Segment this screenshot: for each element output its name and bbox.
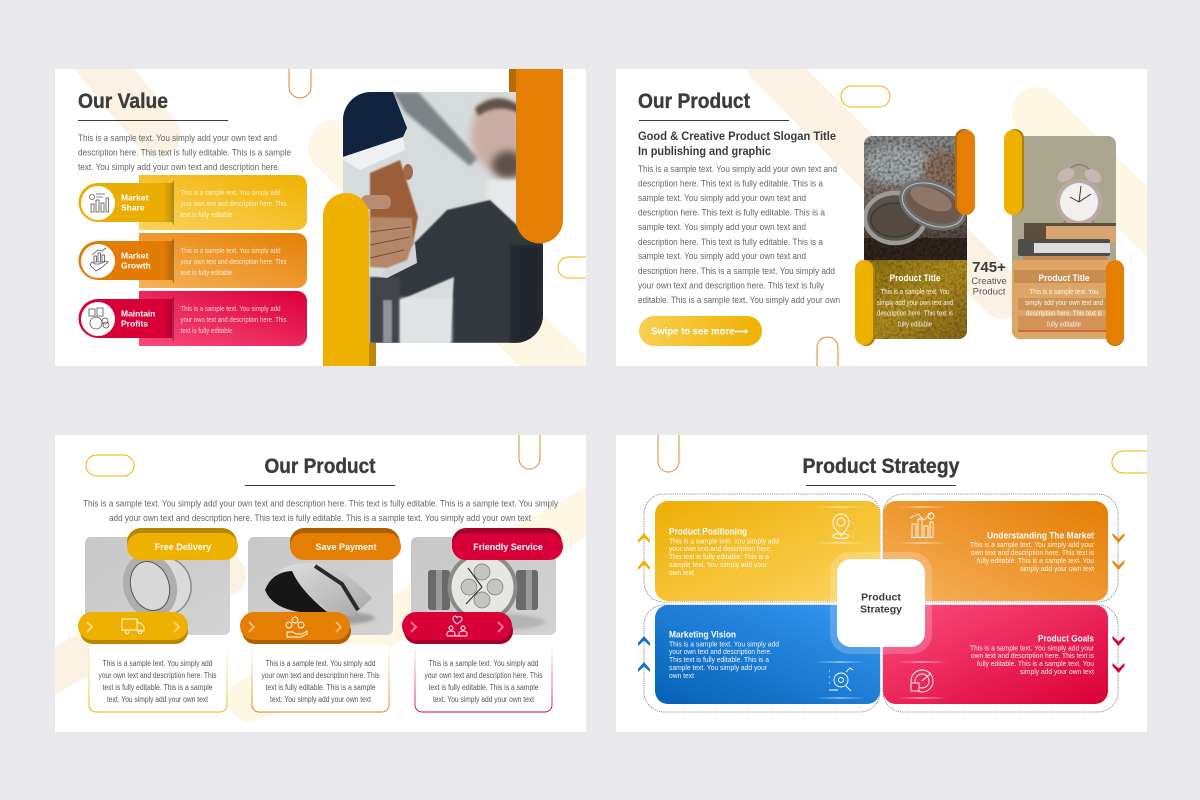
quadrant: marketing vision: This is a sample text. You simply add bbox=[669, 640, 779, 648]
heading: our product centered: Our Product bbox=[264, 455, 376, 478]
quadrant: understanding the market bbox=[883, 501, 1108, 601]
text: product title right bbox=[1025, 273, 1103, 328]
icon: people and heart bbox=[447, 616, 467, 636]
subheading: slogan: Good & Creative Product Slogan Title bbox=[638, 131, 836, 143]
text box: save payment: text. You simply add your own text bbox=[270, 695, 372, 704]
heading underline bbox=[639, 120, 789, 121]
icon: market chart bbox=[910, 512, 934, 538]
row: market growth: This is a sample text. You simply add bbox=[180, 248, 281, 255]
text box: save payment bbox=[252, 645, 389, 712]
panel: our product cards slide bbox=[55, 435, 586, 732]
text box: free delivery: This is a sample text. You simply add bbox=[102, 659, 212, 668]
row: market share: your own text and description here. This bbox=[180, 201, 287, 208]
arrows: blue up bbox=[638, 636, 650, 672]
quadrant: marketing vision: your own text and description here. bbox=[669, 647, 772, 656]
arrows: red down bbox=[1112, 636, 1124, 673]
row: market share: Market bbox=[121, 192, 149, 202]
text box: friendly service: text is fully editable. This is a sample bbox=[428, 683, 539, 692]
quadrant: product positioning bbox=[655, 501, 880, 601]
row: maintain profits bbox=[78, 291, 307, 346]
center: product strategy badge: Strategy bbox=[860, 604, 902, 616]
text box: friendly service: your own text and description here. This bbox=[424, 671, 542, 680]
row: maintain profits: This is a sample text. You simply add bbox=[180, 306, 281, 313]
button: swipe to see more: Swipe to see more⟶ bbox=[651, 326, 749, 338]
text: product title left: fully editable bbox=[898, 320, 932, 328]
text: product title left: Product Title bbox=[890, 273, 940, 283]
row: market share bbox=[78, 175, 307, 230]
card: friendly service bbox=[402, 528, 563, 712]
text block: intro: This is a sample text. You simply add your own text and description here. This text is fully editable. This is a sample text. You simply bbox=[83, 498, 558, 510]
button: swipe to see more bbox=[639, 316, 762, 346]
text: product title right: fully editable bbox=[1047, 320, 1081, 328]
quadrant: understanding the market: This is a sample text. You simply add your bbox=[970, 540, 1094, 549]
label: payment icon pill bbox=[240, 612, 351, 644]
quadrant: product positioning: Product Positioning bbox=[669, 526, 747, 538]
text block: product description: description here. This is a sample text. You simply add bbox=[638, 266, 835, 277]
label: free delivery pill bbox=[127, 528, 238, 560]
quadrant: product goals: fully editable. This is a sample text. You bbox=[977, 659, 1094, 668]
center: product strategy badge bbox=[830, 552, 932, 654]
text box: friendly service: This is a sample text. You simply add bbox=[428, 659, 538, 668]
subheading: slogan bbox=[638, 131, 836, 158]
row: maintain profits: your own text and description here. This bbox=[180, 317, 287, 324]
quadrant: product positioning: This is a sample text. You simply add bbox=[669, 536, 779, 546]
row: market growth: Growth bbox=[121, 260, 151, 270]
text: product title left: This is a sample text. You bbox=[880, 287, 950, 296]
row: market growth bbox=[78, 233, 307, 288]
quadrant: understanding the market: fully editable. This is a sample text. You bbox=[977, 556, 1094, 565]
heading underline bbox=[806, 485, 956, 486]
card: product clock and books bbox=[1004, 129, 1124, 346]
center: product strategy badge: Product bbox=[861, 592, 901, 604]
text block: value intro: description here. This text is fully editable. This is a sample bbox=[78, 148, 291, 158]
text: product title right: Product Title bbox=[1038, 273, 1090, 283]
panel: our product slide bbox=[616, 69, 1147, 366]
text: product title right: description here. This text is bbox=[1026, 308, 1102, 318]
photo: computer mouse bbox=[248, 537, 393, 635]
arrows: orange down bbox=[1112, 533, 1124, 570]
card: free delivery bbox=[78, 528, 238, 712]
text block: product description: your own text and description here. This text is fully bbox=[638, 280, 824, 292]
stat: 745+ creative product: Product bbox=[973, 286, 1006, 298]
text box: friendly service: text. You simply add your own text bbox=[433, 695, 535, 704]
row: market share: Share bbox=[121, 202, 145, 212]
text block: value intro: text. You simply add your own text and description here. bbox=[78, 162, 280, 173]
arrows: yellow up bbox=[638, 533, 650, 570]
text box: free delivery: text. You simply add your own text bbox=[107, 695, 209, 704]
text block: product description: description here. This text is fully editable. This is a bbox=[638, 178, 824, 190]
card: product rings bbox=[855, 129, 975, 346]
label: save payment pill: Save Payment bbox=[315, 542, 377, 552]
icon: market share bbox=[90, 194, 108, 212]
quadrant: marketing vision: own text bbox=[669, 671, 695, 680]
stat: 745+ creative product bbox=[972, 262, 1006, 294]
panel: product strategy slide bbox=[616, 420, 1172, 732]
text: product title left: description here. This text is bbox=[877, 308, 953, 318]
text: product title left bbox=[877, 273, 953, 328]
bar: orange tab right bbox=[1106, 260, 1124, 346]
quadrant: marketing vision bbox=[655, 605, 880, 704]
quadrant: marketing vision: sample text. You simply add your bbox=[669, 663, 767, 672]
text box: free delivery: text is fully editable. This is a sample bbox=[102, 683, 213, 692]
text block: product description: sample text. You simply add your own text and bbox=[638, 193, 806, 204]
icon: maintain profits bbox=[89, 308, 109, 329]
quadrant: product goals: own text and description here. This text is bbox=[971, 651, 1094, 660]
row: maintain profits: Maintain bbox=[121, 308, 155, 318]
row: maintain profits: Profits bbox=[121, 318, 148, 328]
text block: product description: This is a sample text. You simply add your own text and bbox=[638, 164, 837, 175]
text box: save payment: This is a sample text. You simply add bbox=[266, 659, 376, 668]
photo: wrist watch bbox=[411, 537, 556, 635]
quadrant: product positioning: own text bbox=[669, 568, 695, 577]
panel: our value slide bbox=[55, 69, 586, 366]
label: service icon pill bbox=[402, 612, 513, 644]
icon: truck bbox=[122, 619, 144, 634]
row: market share: text is fully editable bbox=[180, 212, 233, 219]
row: market growth: text is fully editable bbox=[180, 270, 233, 277]
text block: value intro bbox=[78, 133, 291, 173]
card: save payment bbox=[240, 528, 401, 712]
quadrant: product goals bbox=[883, 605, 1108, 704]
bar: yellow tab right bbox=[1004, 129, 1024, 215]
quadrant: marketing vision: This text is fully editable. This is a bbox=[669, 655, 770, 664]
quadrant: product goals: This is a sample text. You simply add your bbox=[970, 644, 1094, 652]
photo: handshake bbox=[343, 92, 545, 343]
quadrant: product positioning: sample text. You simply add your bbox=[669, 560, 767, 569]
text block: intro bbox=[83, 498, 558, 524]
bar: yellow tab bbox=[855, 260, 875, 346]
row: market growth: your own text and description here. This bbox=[180, 259, 287, 266]
text: product title right: This is a sample text. You bbox=[1030, 287, 1098, 296]
icon: location pin bbox=[833, 514, 849, 538]
quadrant: product goals: Product Goals bbox=[1038, 634, 1094, 644]
subheading: slogan: In publishing and graphic bbox=[638, 146, 772, 158]
heading underline bbox=[245, 485, 395, 486]
quadrant: product positioning: your own text and description here. bbox=[669, 544, 772, 553]
text box: friendly service bbox=[415, 645, 552, 712]
quadrant: product positioning: This text is fully editable. This is a bbox=[669, 552, 770, 561]
bar: orange tab bbox=[955, 129, 975, 215]
stat: 745+ creative product: Creative bbox=[971, 276, 1007, 287]
label: friendly service pill: Friendly Service bbox=[473, 542, 543, 552]
text block: product description: description here. This text is fully editable. This is a bbox=[638, 237, 824, 248]
heading: product strategy: Product Strategy bbox=[802, 455, 960, 478]
label: friendly service pill bbox=[452, 528, 563, 560]
heading underline bbox=[78, 120, 228, 121]
quadrant: understanding the market: Understanding The Market bbox=[987, 530, 1095, 542]
text block: product description: editable. This is a sample text. You simply add your own bbox=[638, 295, 840, 306]
text block: value intro: This is a sample text. You simply add your own text and bbox=[78, 133, 277, 144]
text block: product description: description here. This text is fully editable. This is a bbox=[638, 208, 826, 218]
text box: save payment: your own text and description here. This bbox=[262, 671, 380, 680]
quadrant: product goals: simply add your own text bbox=[1020, 667, 1095, 676]
text: product title left: simply add your own text and bbox=[877, 298, 953, 307]
quadrant: marketing vision: Marketing Vision bbox=[669, 630, 736, 640]
bar: yellow accent bbox=[323, 193, 376, 366]
text block: intro: add your own text and description here. This text is fully editable. This is a sample text. You simply add your own text bbox=[109, 513, 531, 524]
text box: free delivery bbox=[89, 645, 227, 712]
heading: our product: Our Product bbox=[638, 90, 750, 113]
text: product title right: simply add your own text and bbox=[1025, 298, 1103, 307]
text box: free delivery: your own text and description here. This bbox=[98, 671, 216, 680]
label: delivery icon pill bbox=[78, 612, 188, 644]
icon: market growth bbox=[90, 248, 108, 271]
row: market growth: Market bbox=[121, 250, 149, 260]
heading: our value: Our Value bbox=[78, 90, 168, 113]
text box: save payment: text is fully editable. This is a sample bbox=[266, 683, 376, 692]
text block: product description: sample text. You simply add your own text and bbox=[638, 251, 806, 262]
label: save payment pill bbox=[290, 528, 401, 560]
icon: eye magnifier bbox=[829, 668, 853, 691]
photo: diamond ring bbox=[85, 537, 230, 635]
row: market share: This is a sample text. You simply add bbox=[180, 190, 281, 197]
bar: orange accent bbox=[509, 69, 563, 243]
text block: product description: sample text. You simply add your own text and bbox=[638, 222, 806, 233]
stat: 745+ creative product: 745+ bbox=[972, 259, 1006, 276]
quadrant: understanding the market: own text and description here. This text is bbox=[971, 548, 1094, 557]
label: free delivery pill: Free Delivery bbox=[155, 542, 211, 552]
quadrant: understanding the market: simply add your own text bbox=[1020, 564, 1095, 573]
icon: coins in hand bbox=[286, 617, 307, 637]
icon: target bbox=[911, 670, 933, 692]
text block: product description bbox=[638, 164, 840, 306]
row: maintain profits: text is fully editable bbox=[180, 328, 233, 335]
